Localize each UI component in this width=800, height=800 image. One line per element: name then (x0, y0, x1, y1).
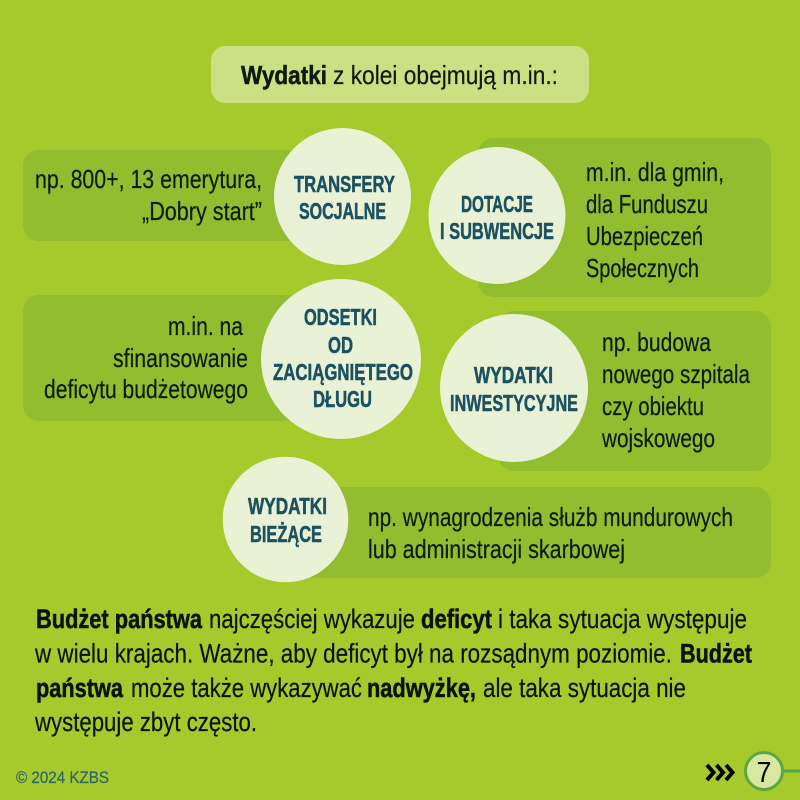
text block: budżet państwa: Budżet (680, 638, 752, 668)
description: odsetki: m.in. na (168, 311, 243, 341)
icon: next page chevrons (707, 765, 732, 780)
circle: transfery socjalne (274, 128, 411, 265)
description: odsetki: sfinansowanie (113, 343, 248, 373)
description: dotacje i subwencje: Ubezpieczeń (586, 221, 703, 251)
panel: dotacje i subwencje (428, 138, 771, 297)
text block: budżet państwa: w wielu krajach. Ważne, aby deficyt był na rozsądnym poziomie. (34, 638, 672, 668)
text block: budżet państwa: ale taka sytuacja nie (483, 673, 686, 703)
text block: budżet państwa: i taka sytuacja występuje (498, 604, 747, 634)
description: wydatki inwestycyjne: czy obiektu (602, 391, 704, 421)
description: dotacje i subwencje (586, 157, 724, 283)
panel: wydatki inwestycyjne (440, 311, 771, 471)
description: odsetki: deficytu budżetowego (44, 374, 248, 404)
description: transfery socjalne: np. 800+, 13 emerytura, (35, 164, 262, 194)
heading: Wydatki z kolei obejmują m.in.: z kolei obejmują m.in.: (333, 60, 558, 90)
circle: wydatki bieżące (223, 457, 348, 582)
circle: odsetki od zaciągniętego długu: OD (328, 332, 353, 358)
panel: transfery socjalne (23, 128, 411, 265)
panel: wydatki bieżące (223, 457, 771, 582)
text block: budżet państwa: państwa (36, 673, 123, 703)
description: wydatki bieżące (368, 502, 733, 564)
text block: budżet państwa: występuje zbyt często. (34, 707, 257, 737)
page number badge (746, 752, 800, 790)
circle: dotacje i subwencje (428, 147, 566, 284)
circle: wydatki inwestycyjne: INWESTYCYJNE (450, 390, 578, 416)
panel: odsetki od zaciągniętego długu (23, 279, 421, 439)
text block: budżet państwa: najczęściej wykazuje (209, 604, 415, 634)
description: dotacje i subwencje: m.in. dla gmin, (586, 157, 724, 187)
circle: odsetki od zaciągniętego długu (261, 279, 421, 439)
description: wydatki inwestycyjne: np. budowa (602, 327, 711, 357)
description: wydatki inwestycyjne (601, 327, 750, 453)
circle: transfery socjalne: TRANSFERY (294, 171, 395, 197)
description: dotacje i subwencje: Społecznych (586, 253, 699, 283)
text block: budżet państwa: deficyt (421, 604, 492, 634)
description: odsetki (44, 311, 248, 404)
copyright: © 2024 KZBS (16, 768, 109, 787)
text block: budżet państwa: Budżet państwa (36, 604, 202, 634)
circle: wydatki inwestycyjne: WYDATKI (474, 362, 553, 388)
circle: wydatki inwestycyjne (440, 314, 588, 462)
circle: odsetki od zaciągniętego długu: ZACIĄGNIĘTEGO (273, 359, 413, 385)
description: transfery socjalne (35, 164, 262, 226)
page number badge: 7 (756, 757, 772, 789)
circle: dotacje i subwencje: DOTACJE (461, 191, 533, 217)
circle: odsetki od zaciągniętego długu: DŁUGU (313, 386, 372, 412)
heading: Wydatki z kolei obejmują m.in. (211, 46, 589, 103)
text block: budżet państwa (34, 604, 752, 737)
circle: transfery socjalne: SOCJALNE (299, 198, 386, 224)
description: transfery socjalne: „Dobry start” (142, 196, 262, 226)
description: wydatki inwestycyjne: nowego szpitala (602, 359, 750, 389)
circle: odsetki od zaciągniętego długu: ODSETKI (304, 304, 377, 330)
description: wydatki inwestycyjne: wojskowego (601, 423, 715, 453)
text block: budżet państwa: nadwyżkę, (367, 673, 476, 703)
description: wydatki bieżące: lub administracji skarbowej (368, 534, 625, 564)
circle: dotacje i subwencje: I SUBWENCJE (440, 218, 554, 244)
heading: Wydatki z kolei obejmują m.in.: Wydatki (241, 60, 327, 90)
text block: budżet państwa: może także wykazywać (131, 673, 362, 703)
circle: wydatki bieżące: WYDATKI (248, 493, 327, 519)
circle: wydatki bieżące: BIEŻĄCE (250, 521, 322, 547)
description: dotacje i subwencje: dla Funduszu (586, 189, 708, 219)
